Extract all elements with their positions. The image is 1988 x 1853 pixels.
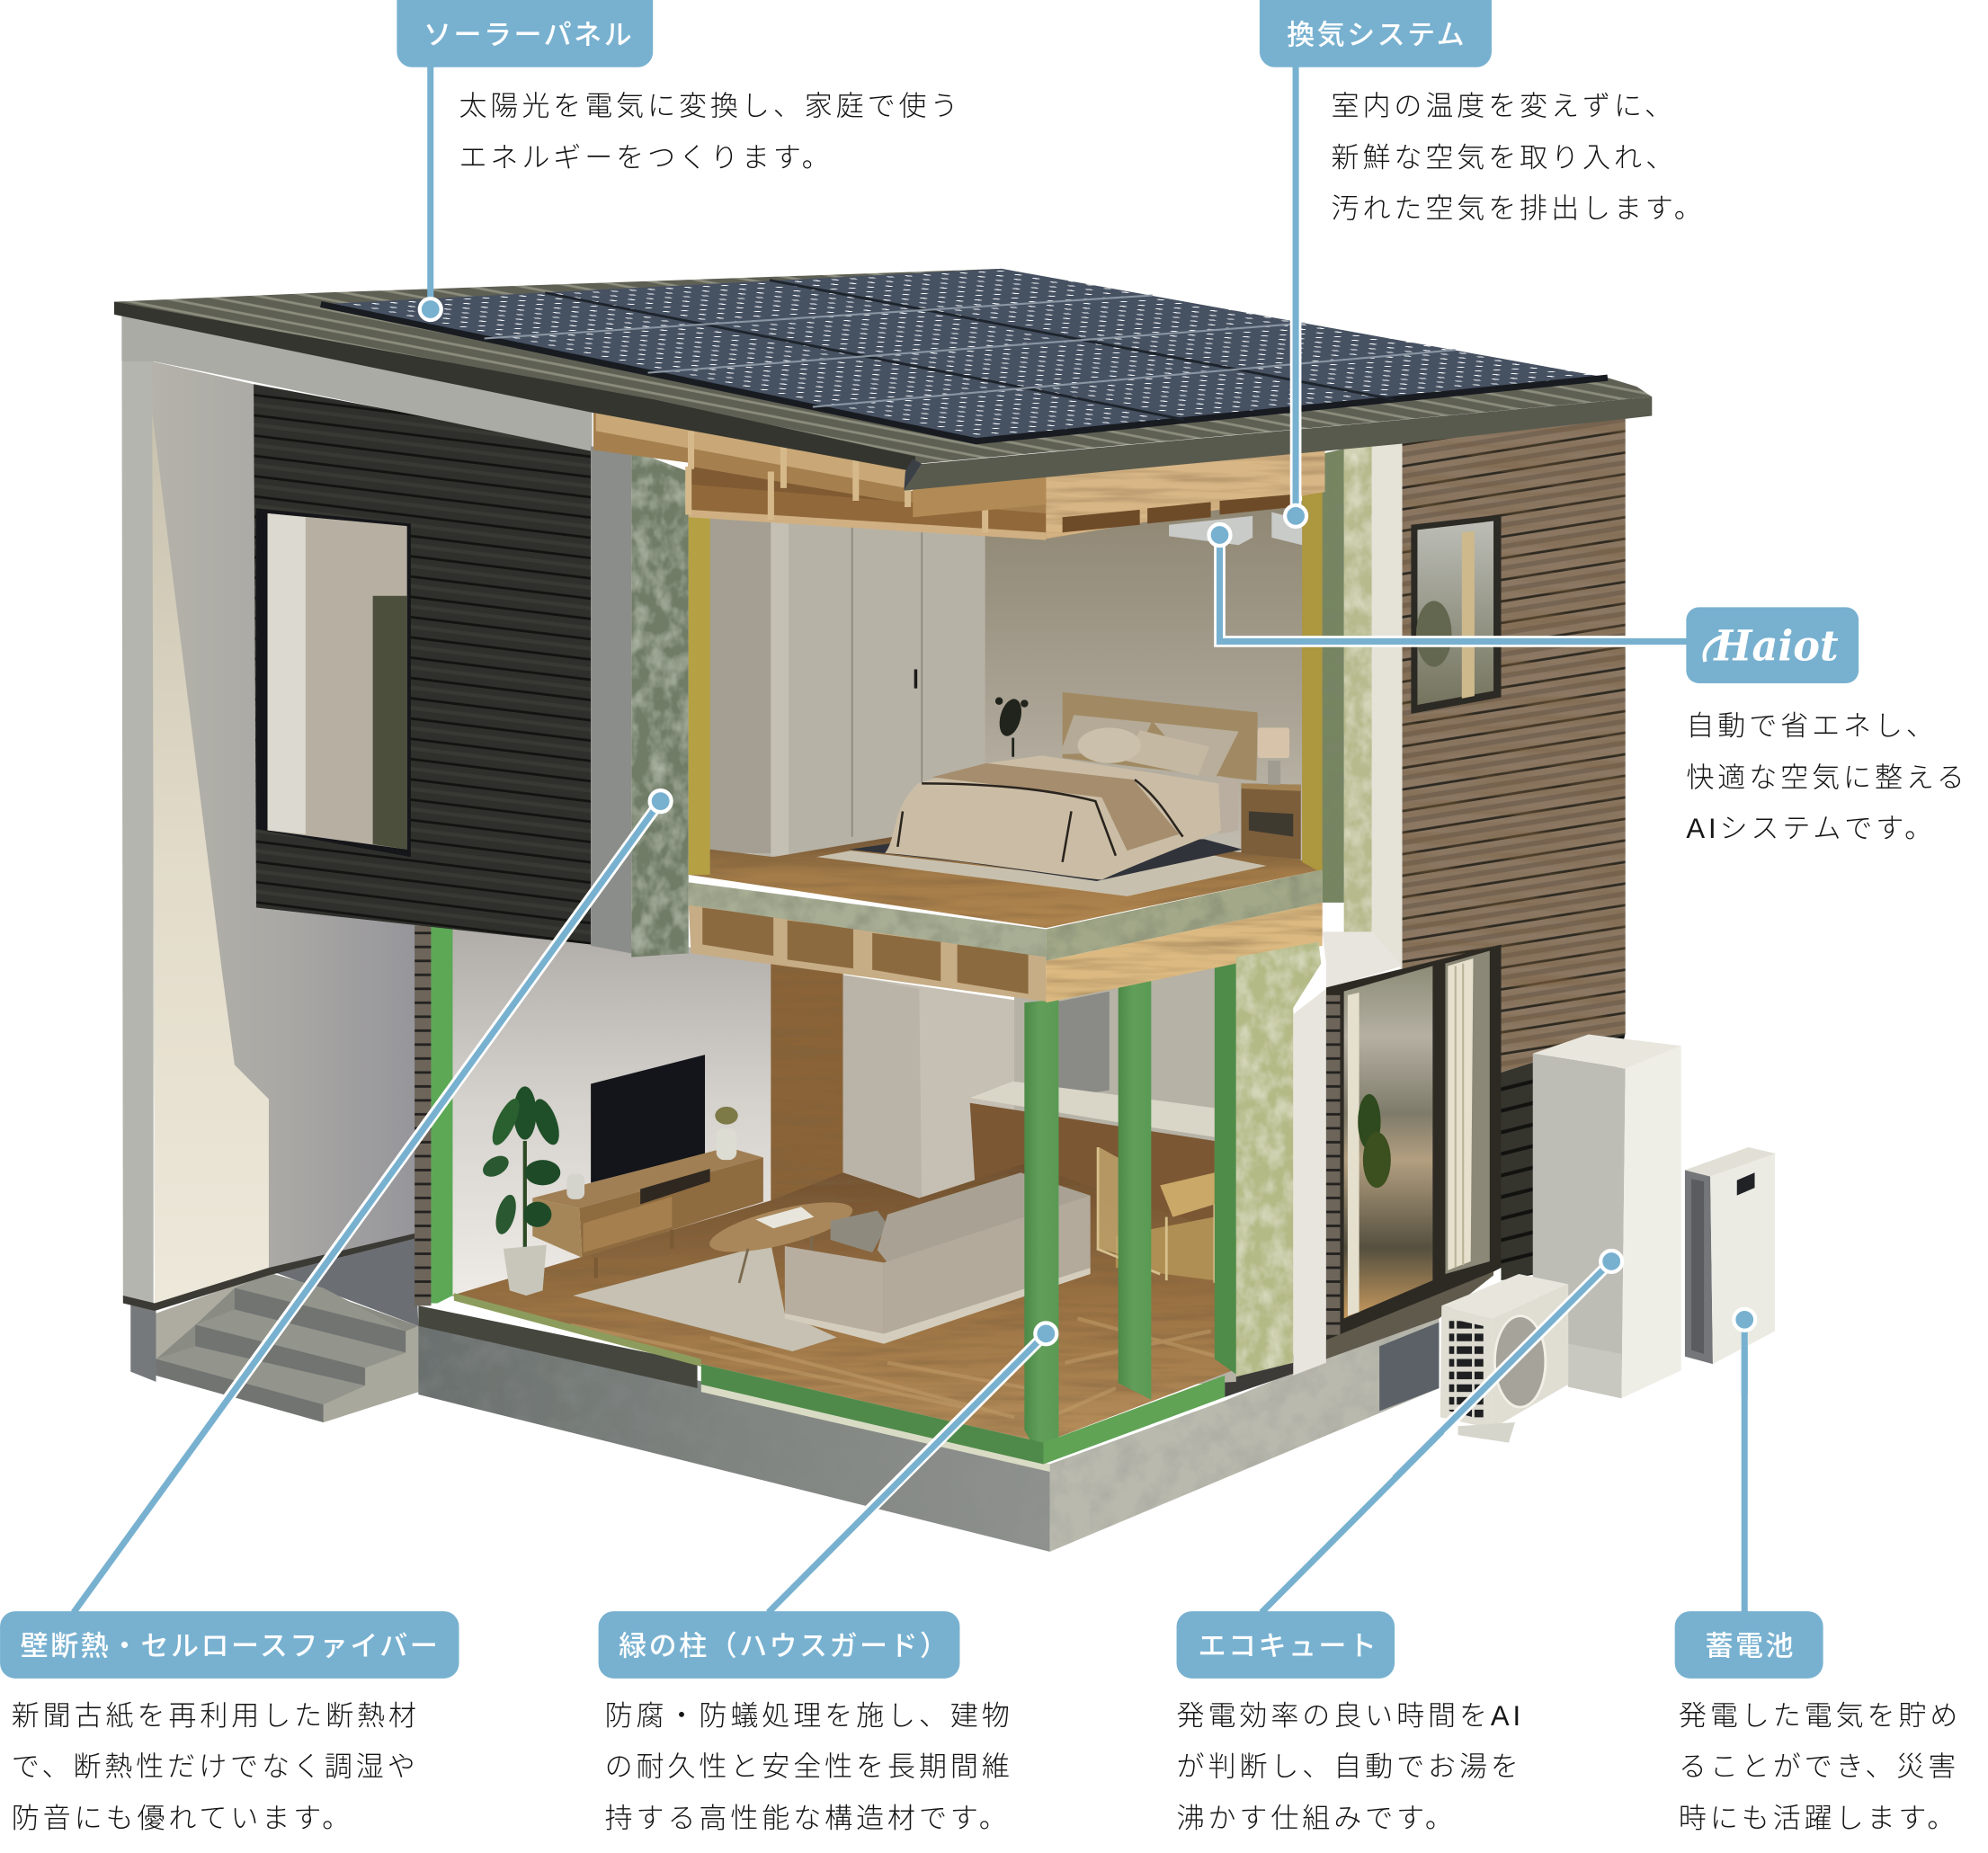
label: EcoCute: エコキュート	[1199, 1630, 1378, 1661]
text: EcoCute: 沸かす仕組みです。	[1177, 1803, 1457, 1834]
roof framing	[593, 412, 1325, 540]
text: ventilation	[1332, 90, 1706, 225]
label: wall insulation	[0, 1611, 459, 1679]
upper storey room	[689, 488, 1325, 928]
label: Haiot logo	[1686, 607, 1859, 683]
leader line over equipment	[1395, 1251, 1755, 1478]
battery	[1685, 1147, 1776, 1364]
text: EcoCute: が判断し、自動でお湯を	[1177, 1751, 1522, 1782]
bed and bedroom furniture	[816, 692, 1301, 896]
right insulation and door	[1236, 414, 1626, 1376]
solar panels	[321, 269, 1608, 441]
label: battery	[1675, 1611, 1823, 1679]
text: green post: 防腐・防蟻処理を施し、建物	[605, 1700, 1013, 1732]
label: solar panel	[397, 0, 653, 67]
air conditioner outdoor unit	[1440, 1274, 1568, 1443]
text: Haiot: 快適な空気に整える	[1686, 762, 1968, 794]
label: solar panel: ソーラーパネル	[423, 19, 634, 50]
lower storey room	[451, 919, 1236, 1443]
text: solar panel: 太陽光を電気に変換し、家庭で使う	[459, 90, 961, 121]
text: battery: 時にも活躍します。	[1679, 1803, 1958, 1834]
label: Haiot logo: Haiot	[1712, 621, 1839, 671]
text: battery	[1679, 1700, 1961, 1834]
text: battery: ることができ、災害	[1679, 1751, 1959, 1782]
text: ventilation: 新鮮な空気を取り入れ、	[1332, 142, 1677, 174]
left facade	[121, 316, 689, 1311]
label: ventilation: 換気システム	[1287, 19, 1466, 50]
text: solar panel	[459, 90, 961, 174]
text: green post: 持する高性能な構造材です。	[605, 1803, 1011, 1834]
text: ventilation: 汚れた空気を排出します。	[1332, 193, 1706, 225]
label: battery: 蓄電池	[1706, 1630, 1796, 1661]
roof	[114, 269, 1652, 491]
text: Haiot: AIシステムです。	[1686, 813, 1936, 844]
foundation and steps	[130, 1237, 1439, 1552]
heat pump unit	[1533, 1035, 1681, 1398]
text: ventilation: 室内の温度を変えずに、	[1332, 90, 1676, 121]
label: green post	[599, 1611, 959, 1679]
green posts (house guard)	[418, 921, 1236, 1465]
text: solar panel: エネルギーをつくります。	[459, 142, 834, 174]
ventilation units	[1169, 512, 1302, 545]
text: Haiot: 自動で省エネし、	[1686, 710, 1938, 742]
floor slab with joists	[689, 869, 1323, 1002]
text: wall insulation	[12, 1700, 420, 1834]
text: battery: 発電した電気を貯め	[1679, 1700, 1961, 1732]
label: green post: 緑の柱（ハウスガード）	[619, 1630, 949, 1661]
text: Haiot	[1686, 710, 1968, 844]
text: wall insulation: で、断熱性だけでなく調湿や	[12, 1751, 419, 1782]
text: wall insulation: 新聞古紙を再利用した断熱材	[12, 1700, 420, 1732]
leader lines and callout dots	[74, 64, 1744, 1613]
text: green post	[605, 1700, 1013, 1834]
label: EcoCute	[1177, 1611, 1395, 1679]
text: green post: の耐久性と安全性を長期間維	[605, 1751, 1013, 1782]
text: wall insulation: 防音にも優れています。	[12, 1803, 353, 1834]
text: EcoCute: 発電効率の良い時間をAI	[1177, 1700, 1524, 1732]
text: EcoCute	[1177, 1700, 1524, 1834]
label: ventilation	[1260, 0, 1492, 67]
living room furniture	[479, 1055, 1091, 1351]
label: wall insulation: 壁断熱・セルロースファイバー	[21, 1630, 440, 1661]
